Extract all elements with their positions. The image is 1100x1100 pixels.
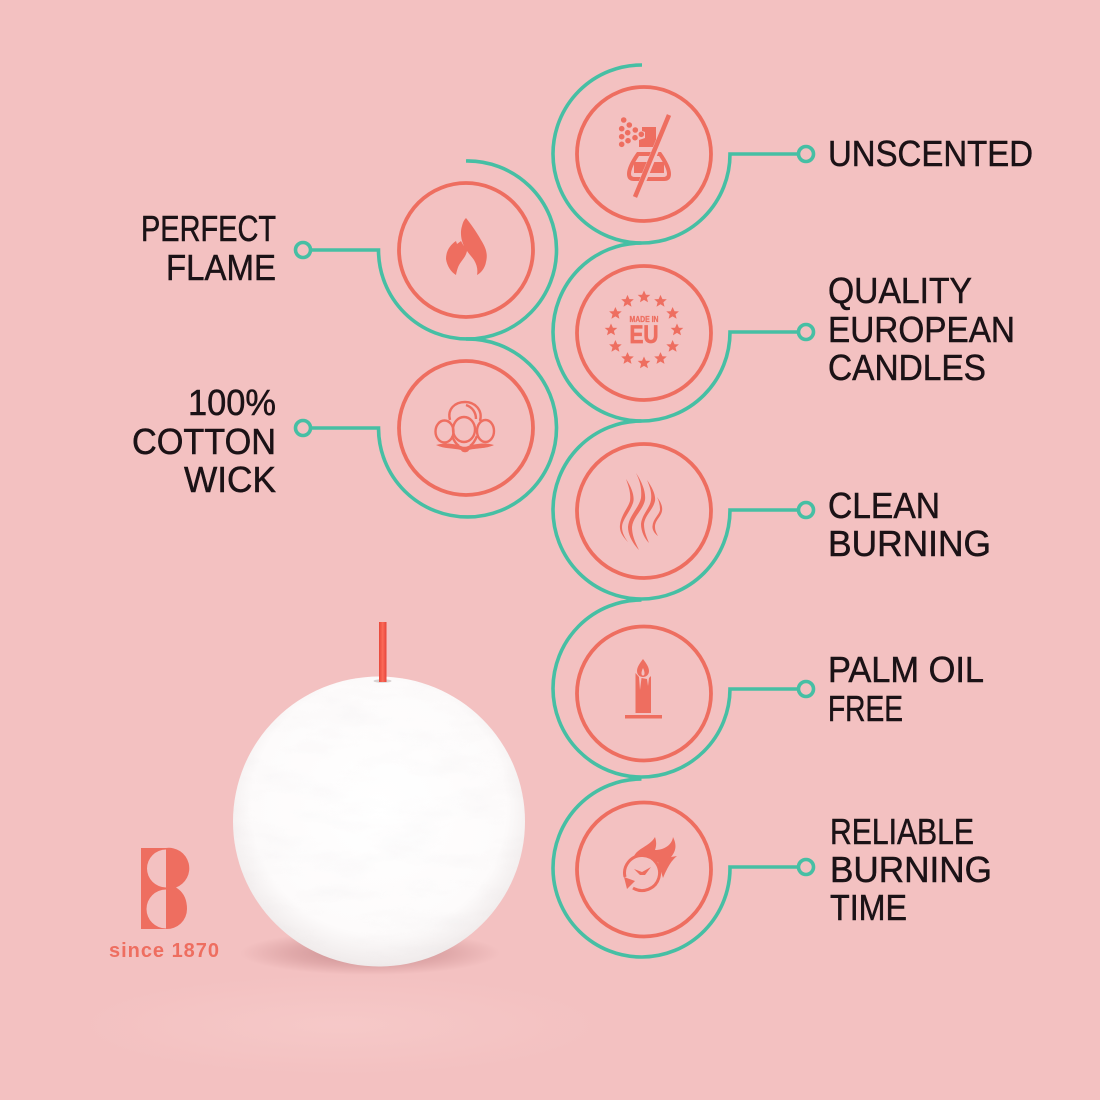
icon: crossed out spray bottle — [619, 115, 671, 197]
icon: candle — [625, 659, 662, 718]
label — [828, 649, 984, 729]
label: FREE — [828, 688, 903, 729]
label: EUROPEAN — [828, 309, 1015, 350]
feature: palm oil free — [553, 600, 984, 777]
icon: smoke waves — [620, 473, 662, 550]
candle product photo — [233, 622, 525, 972]
label — [132, 382, 276, 500]
label — [828, 270, 1015, 388]
label: CANDLES — [828, 347, 986, 388]
icon: made in EU stars — [605, 290, 683, 368]
label: CLEAN — [828, 485, 940, 526]
feature: clean burning — [553, 421, 991, 599]
label — [141, 208, 276, 288]
icon: made in EU stars: MADE IN — [630, 315, 659, 324]
label: BURNING — [828, 523, 991, 564]
label: COTTON — [132, 421, 276, 462]
label: QUALITY — [828, 270, 972, 311]
feature: reliable burning time — [553, 779, 992, 957]
label — [830, 811, 992, 928]
icon: made in EU stars: EU — [630, 321, 658, 349]
feature: 100% cotton wick — [132, 339, 556, 517]
icon: clock with flames — [624, 837, 677, 891]
label: FLAME — [166, 247, 276, 288]
label: TIME — [830, 887, 907, 928]
label: RELIABLE — [830, 811, 974, 852]
logo: B since 1870: since 1870 — [109, 940, 219, 962]
label: 100% — [188, 382, 276, 423]
icon: flame — [446, 218, 487, 275]
logo: B since 1870 — [109, 848, 219, 962]
label: BURNING — [830, 849, 992, 890]
feature: unscented — [553, 65, 1033, 243]
label: WICK — [184, 459, 276, 500]
label: UNSCENTED — [828, 133, 1033, 174]
label: PALM OIL — [828, 649, 984, 690]
feature: quality european candles — [553, 243, 1015, 421]
label — [828, 485, 991, 564]
icon: cotton boll — [436, 402, 494, 452]
label: PERFECT — [141, 208, 276, 249]
feature: perfect flame — [141, 161, 556, 339]
